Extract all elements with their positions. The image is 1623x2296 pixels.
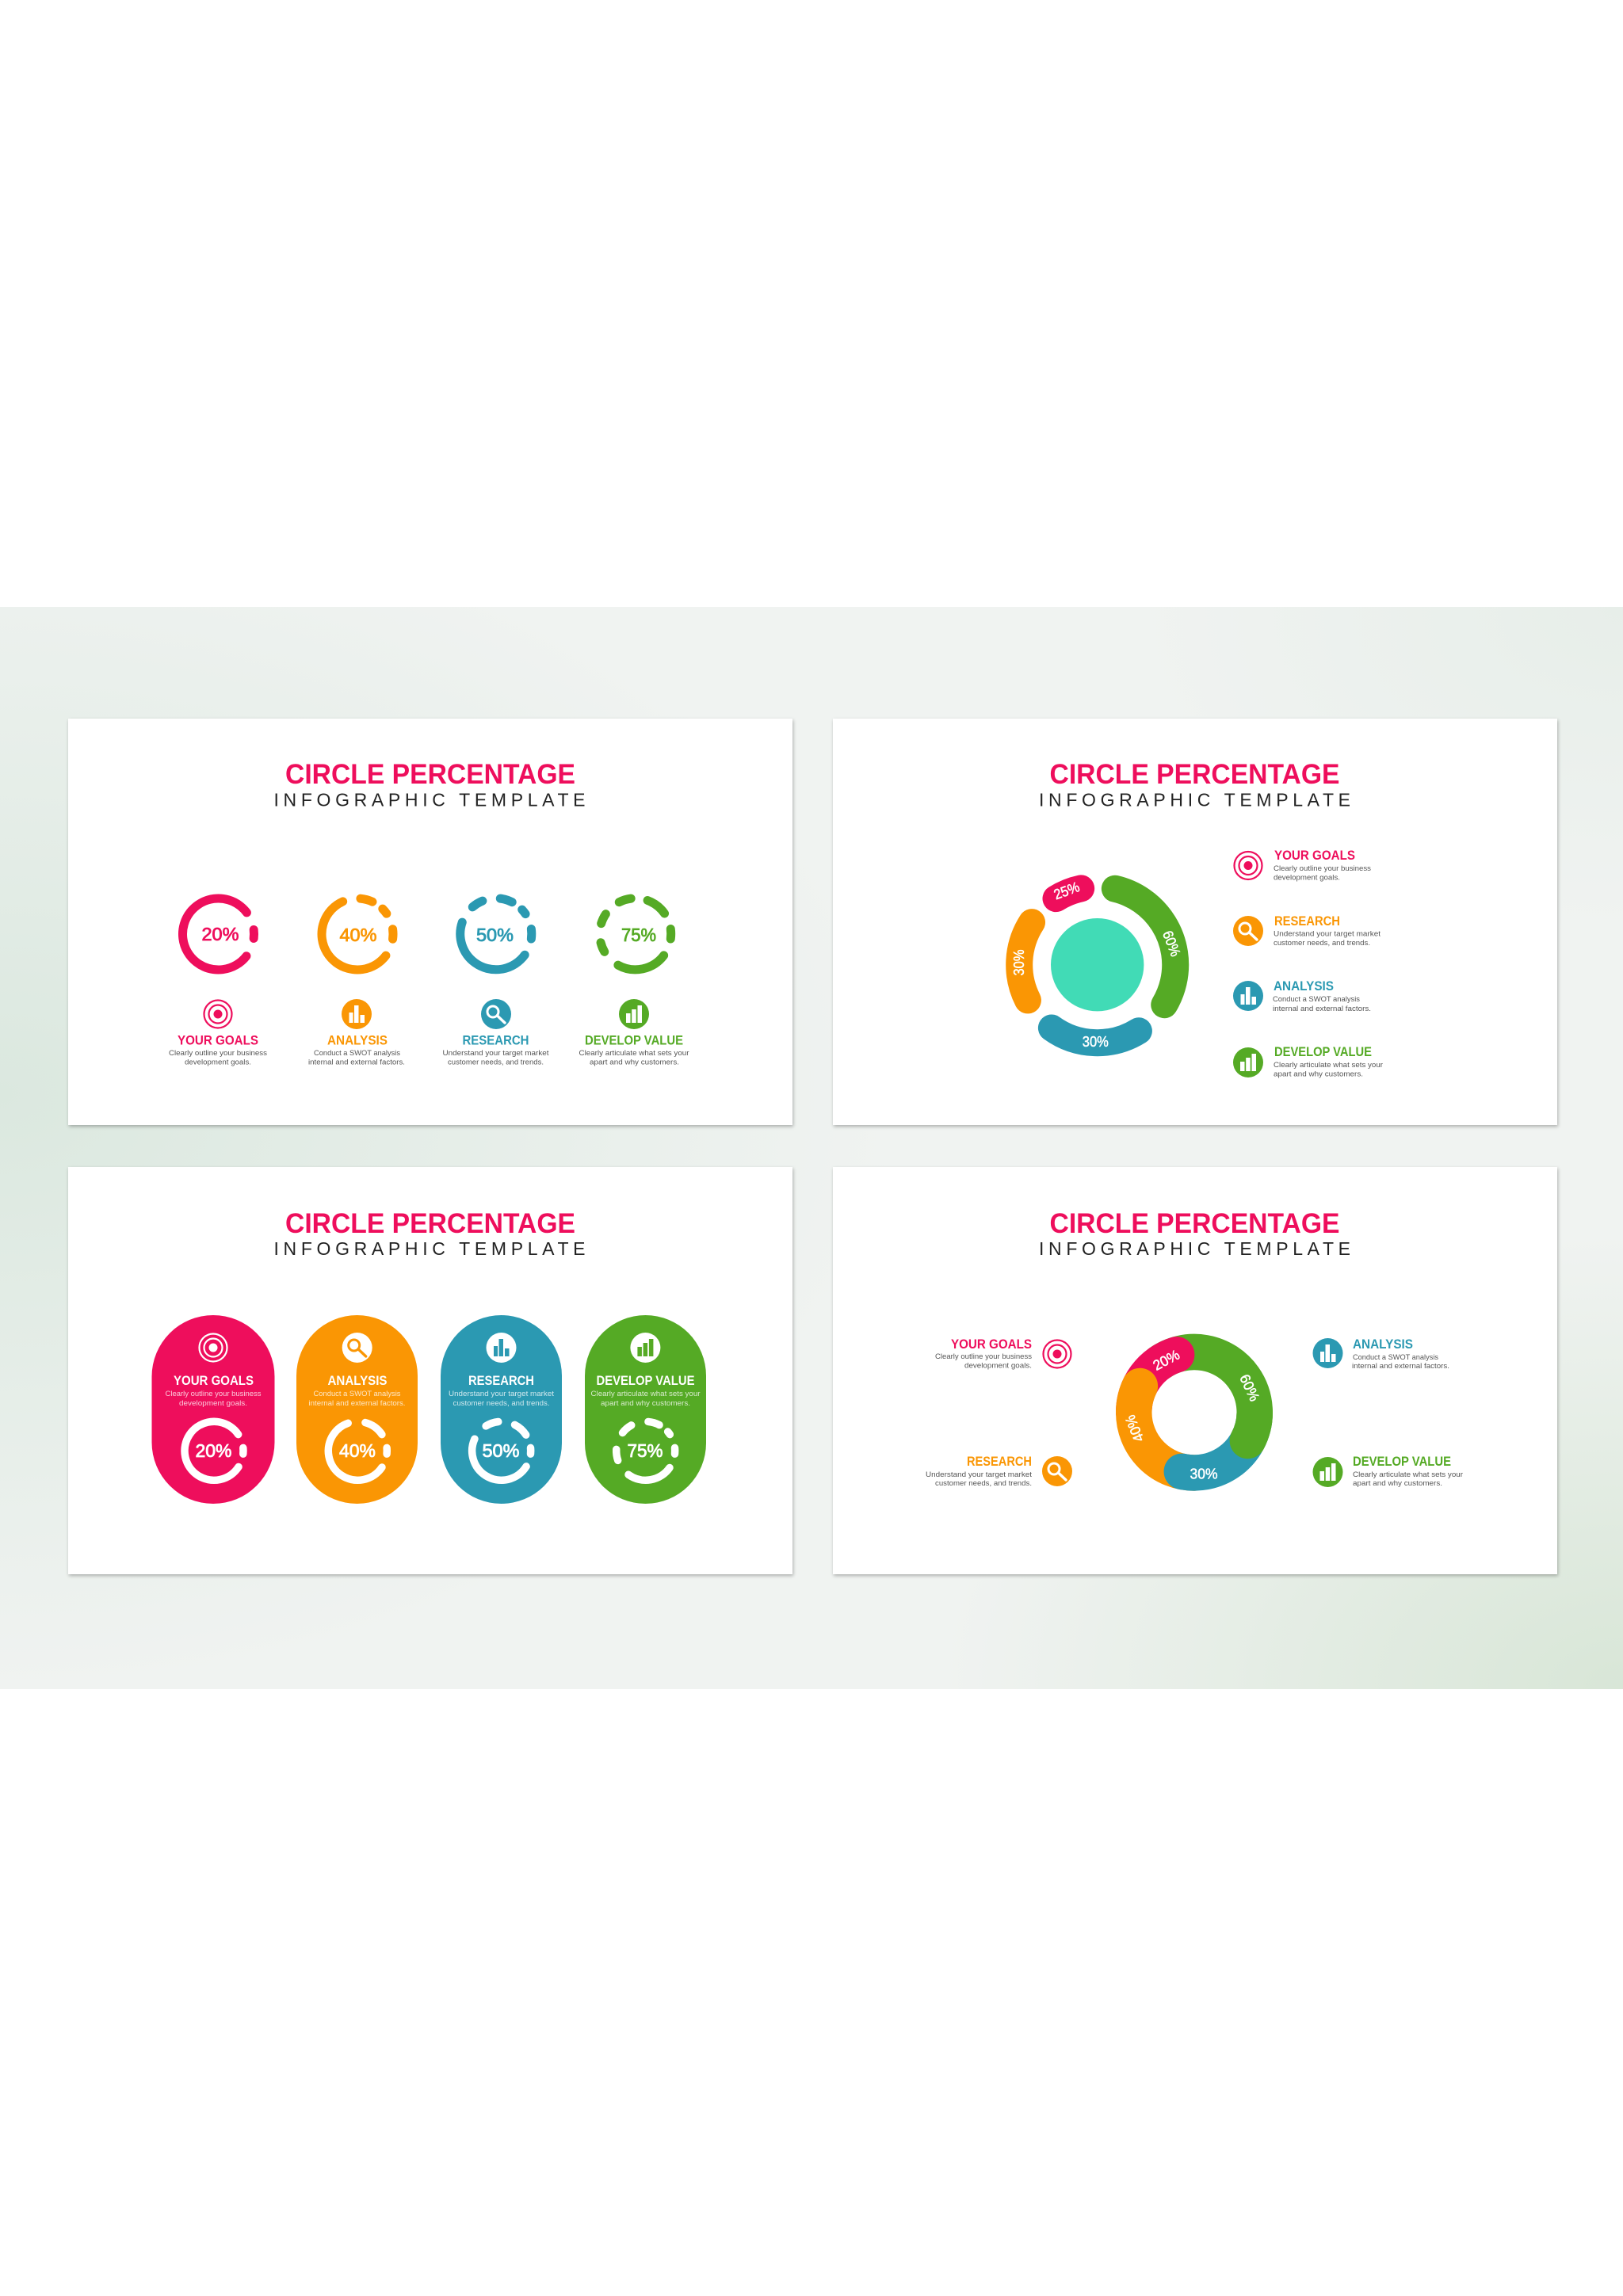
percent: 75%: 75% <box>621 925 656 945</box>
pill description: apart and why customers. <box>601 1399 690 1408</box>
callout: develop value <box>1353 1455 1463 1488</box>
legend text: develop value <box>1274 1045 1383 1079</box>
callout: develop value: apart and why customers. <box>1353 1479 1442 1488</box>
icon: target <box>204 1000 231 1028</box>
pill heading: RESEARCH <box>468 1374 534 1388</box>
callout: research: Understand your target market <box>926 1470 1032 1479</box>
legend text: analysis: Conduct a SWOT analysis <box>1273 995 1360 1004</box>
title: CIRCLE PERCENTAGE <box>285 759 575 790</box>
pill description: Clearly articulate what sets your <box>591 1390 701 1398</box>
callout: develop value: Clearly articulate what sets your <box>1353 1470 1463 1479</box>
callout: your goals: Clearly outline your business <box>935 1352 1032 1361</box>
icon: magnifier <box>342 1333 372 1363</box>
text block: research <box>442 1033 549 1066</box>
chart: segmented ring: 25% <box>1052 879 1082 902</box>
callout: research: customer needs, and trends. <box>935 1479 1032 1488</box>
chart: donut <box>1110 1329 1278 1497</box>
callout: research <box>926 1455 1032 1488</box>
icon: growth bars <box>630 1333 660 1363</box>
text block: analysis: ANALYSIS <box>327 1033 388 1047</box>
legend text: research: Understand your target market <box>1274 930 1381 938</box>
legend text: research: RESEARCH <box>1274 914 1340 929</box>
callout: your goals: development goals. <box>964 1361 1032 1371</box>
percent: 20%: 20% <box>201 924 239 944</box>
pill: develop value <box>585 1315 706 1504</box>
subtitle: INFOGRAPHIC TEMPLATE <box>1039 789 1350 810</box>
ring: 20% <box>174 1410 254 1491</box>
text block: your goals <box>169 1033 267 1066</box>
text block: your goals: development goals. <box>185 1058 251 1066</box>
text block: your goals: Clearly outline your business <box>169 1049 267 1058</box>
pill: research <box>441 1315 562 1504</box>
pill description: Clearly outline your business <box>165 1390 262 1398</box>
percent: 20% <box>195 1440 231 1461</box>
callout: research: RESEARCH <box>967 1455 1032 1469</box>
pill description <box>309 1390 406 1408</box>
text block: develop value: Clearly articulate what sets your <box>579 1049 689 1058</box>
ring: 50% <box>461 1410 542 1491</box>
callout: your goals <box>935 1337 1032 1371</box>
percent: 40%: 40% <box>339 925 377 945</box>
text block: analysis: internal and external factors. <box>308 1058 405 1066</box>
legend text: develop value: apart and why customers. <box>1274 1070 1363 1079</box>
icon: bars <box>487 1333 517 1363</box>
text block: analysis <box>308 1033 405 1066</box>
text block: research: RESEARCH <box>463 1033 529 1047</box>
text block: develop value: apart and why customers. <box>590 1058 679 1066</box>
legend text: analysis: ANALYSIS <box>1274 979 1334 994</box>
legend text: your goals <box>1274 849 1371 883</box>
icon: target <box>1235 852 1262 879</box>
background band <box>0 607 1623 1689</box>
panel: segmented ring with legend <box>833 719 1557 1125</box>
ring: 75% <box>605 1409 687 1492</box>
legend text: develop value: DEVELOP VALUE <box>1274 1045 1372 1059</box>
icon: magnifier <box>1233 916 1263 946</box>
pill description: customer needs, and trends. <box>453 1399 550 1408</box>
panel: coloured pills <box>68 1167 792 1574</box>
text block: research: Understand your target market <box>442 1049 549 1058</box>
legend text: research: customer needs, and trends. <box>1274 939 1370 948</box>
icon: bars <box>1312 1338 1342 1368</box>
legend text: your goals: Clearly outline your business <box>1274 864 1371 873</box>
icon: bars <box>1233 981 1263 1011</box>
pill: analysis <box>296 1315 418 1504</box>
panel: donut chart with callouts <box>833 1167 1557 1574</box>
callout: analysis <box>1352 1337 1449 1371</box>
icon: magnifier <box>481 999 511 1029</box>
chart: donut: 30% <box>1190 1466 1217 1482</box>
text block: develop value <box>579 1033 689 1066</box>
subtitle: INFOGRAPHIC TEMPLATE <box>274 1238 585 1259</box>
pill description: internal and external factors. <box>309 1399 406 1408</box>
legend text: your goals: YOUR GOALS <box>1274 849 1355 863</box>
chart: donut: 60% <box>1236 1372 1262 1404</box>
legend text: analysis: internal and external factors. <box>1273 1005 1371 1013</box>
text block: develop value: DEVELOP VALUE <box>585 1033 683 1047</box>
percent: 50%: 50% <box>476 925 514 945</box>
title: CIRCLE PERCENTAGE <box>1049 759 1339 790</box>
callout: develop value: DEVELOP VALUE <box>1353 1455 1451 1469</box>
title: CIRCLE PERCENTAGE <box>285 1208 575 1239</box>
ring: 20% <box>168 884 269 984</box>
subtitle: INFOGRAPHIC TEMPLATE <box>274 789 585 810</box>
callout: analysis: ANALYSIS <box>1353 1337 1413 1352</box>
icon: growth bars <box>619 999 649 1029</box>
percent: 75% <box>628 1440 663 1461</box>
chart: segmented ring: 30% <box>1011 949 1027 975</box>
title: CIRCLE PERCENTAGE <box>1049 1208 1339 1239</box>
text block: analysis: Conduct a SWOT analysis <box>314 1049 400 1058</box>
text block: your goals: YOUR GOALS <box>178 1033 258 1047</box>
callout: analysis: internal and external factors. <box>1352 1362 1449 1371</box>
ring: 75% <box>586 884 685 984</box>
pill description <box>449 1390 554 1408</box>
icon: magnifier <box>1042 1456 1072 1486</box>
pill description: Conduct a SWOT analysis <box>314 1390 401 1398</box>
pill description: Understand your target market <box>449 1390 554 1398</box>
panel: ring progress row <box>68 719 792 1125</box>
legend text: develop value: Clearly articulate what sets your <box>1274 1061 1383 1070</box>
legend text: your goals: development goals. <box>1274 873 1340 883</box>
legend text: analysis <box>1273 979 1371 1013</box>
pill heading: ANALYSIS <box>328 1374 387 1388</box>
pill heading: YOUR GOALS <box>174 1374 254 1388</box>
chart: segmented ring <box>990 857 1205 1072</box>
ring: 40% <box>317 1410 399 1492</box>
chart: donut: 20% <box>1151 1347 1182 1374</box>
callout: analysis: Conduct a SWOT analysis <box>1353 1353 1438 1362</box>
ring: 50% <box>445 883 546 984</box>
icon: target <box>200 1334 227 1361</box>
icon: growth bars <box>1233 1047 1263 1077</box>
pill description <box>165 1390 262 1408</box>
icon: target <box>1043 1341 1071 1367</box>
pill: your goals <box>152 1315 274 1504</box>
legend text: research <box>1274 914 1381 948</box>
percent: 40% <box>339 1440 376 1461</box>
pill heading: DEVELOP VALUE <box>596 1374 694 1388</box>
percent: 50% <box>482 1440 520 1461</box>
ring: 40% <box>307 883 408 985</box>
chart: donut: 40% <box>1122 1413 1148 1444</box>
text block: research: customer needs, and trends. <box>448 1058 544 1066</box>
icon: growth bars <box>1312 1457 1342 1487</box>
pill description: development goals. <box>179 1399 247 1408</box>
pill description <box>591 1390 701 1408</box>
chart: segmented ring: 60% <box>1159 929 1184 959</box>
subtitle: INFOGRAPHIC TEMPLATE <box>1039 1238 1350 1259</box>
icon: bars <box>342 999 372 1029</box>
callout: your goals: YOUR GOALS <box>951 1337 1032 1352</box>
chart: segmented ring: 30% <box>1083 1034 1109 1050</box>
